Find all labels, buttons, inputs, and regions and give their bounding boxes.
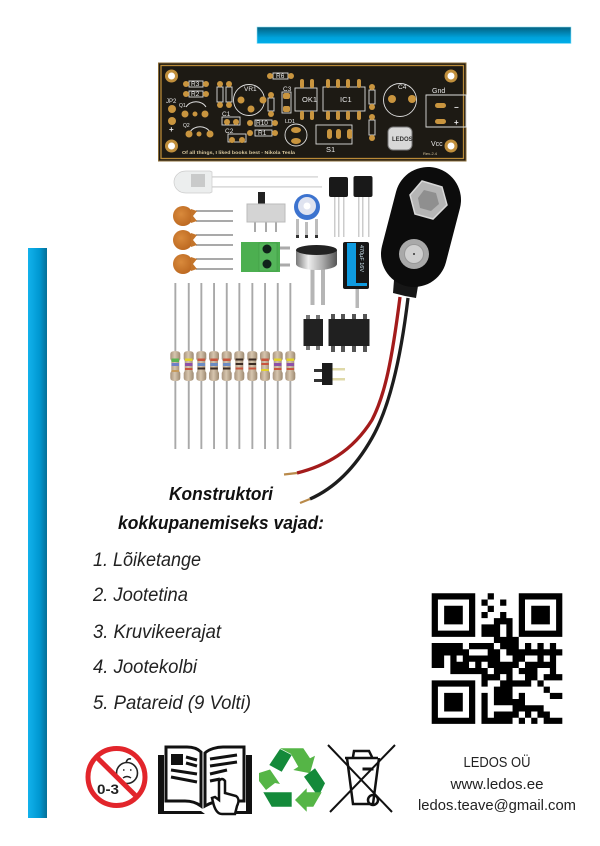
clip round snap bbox=[399, 239, 429, 269]
board labels: C1 bbox=[222, 111, 231, 118]
board mounting holes bbox=[166, 71, 456, 151]
icon: read the manual bbox=[158, 747, 252, 814]
heading bbox=[118, 484, 324, 533]
board labels: R10 bbox=[256, 120, 268, 127]
board labels: C4 bbox=[398, 84, 407, 91]
slide switch bbox=[247, 192, 285, 232]
company contacts bbox=[418, 753, 576, 814]
electrolytic capacitor bbox=[343, 242, 369, 308]
optocoupler OK1 bbox=[304, 315, 323, 350]
tools list: 1. Lõiketange bbox=[93, 550, 201, 571]
clip hex snap bbox=[410, 181, 447, 219]
icon: not for children 0-3 bbox=[88, 748, 145, 806]
battery wires bbox=[284, 297, 408, 503]
terminal block bbox=[241, 242, 290, 272]
board labels: JP2 bbox=[166, 99, 177, 105]
board labels: S1 bbox=[326, 145, 335, 154]
company contacts: www.ledos.ee bbox=[449, 777, 544, 793]
tools list: 5. Patareid (9 Volti) bbox=[93, 693, 251, 714]
board labels: Q2 bbox=[183, 123, 190, 129]
board pads bbox=[168, 73, 446, 144]
LED bbox=[174, 171, 322, 193]
board labels: R2 bbox=[191, 91, 200, 98]
integrated circuit IC1 bbox=[328, 314, 370, 352]
pin header bbox=[314, 363, 345, 385]
board labels: + bbox=[169, 125, 174, 134]
left blue bar bbox=[28, 248, 47, 818]
board labels: − bbox=[454, 103, 459, 112]
tools list: 4. Jootekolbi bbox=[93, 657, 198, 678]
QR code bbox=[432, 593, 562, 724]
board labels: Vcc bbox=[431, 141, 443, 148]
board labels: IC1 bbox=[340, 95, 352, 104]
board labels: Q1 bbox=[179, 103, 186, 109]
icon: not for children 0-3: 0-3 bbox=[97, 781, 119, 797]
battery clip bbox=[393, 181, 447, 298]
trimmer potentiometer bbox=[294, 194, 320, 238]
circuit board bbox=[158, 63, 466, 161]
board labels: R3 bbox=[191, 81, 200, 88]
ceramic capacitors bbox=[173, 206, 233, 274]
top blue bar bbox=[257, 27, 571, 44]
board logo bbox=[388, 127, 412, 150]
icon: recycling bbox=[259, 748, 325, 812]
board labels: VR1 bbox=[244, 86, 257, 93]
transistors bbox=[329, 176, 372, 237]
board labels: LEDOS bbox=[392, 137, 413, 143]
electrolytic capacitor: 470µF 16V bbox=[358, 245, 364, 272]
heading: Konstruktori bbox=[169, 484, 274, 504]
microphone bbox=[296, 245, 337, 305]
board labels: + bbox=[454, 118, 459, 127]
board labels: Rev-2.4 bbox=[423, 151, 438, 156]
company contacts: ledos.teave@gmail.com bbox=[418, 798, 576, 814]
board labels: R6 bbox=[276, 73, 285, 80]
board labels: Gnd bbox=[432, 88, 445, 95]
tools list bbox=[92, 550, 251, 714]
board labels: C3 bbox=[283, 86, 292, 93]
board labels: OK1 bbox=[302, 95, 317, 104]
tools list: 3. Kruvikeerajat bbox=[93, 622, 222, 643]
tools list: 2. Jootetina bbox=[92, 585, 188, 606]
icon: crossed-out bin bbox=[328, 745, 395, 812]
board labels: LD1 bbox=[285, 119, 295, 125]
resistors bbox=[170, 283, 295, 449]
heading: kokkupanemiseks vajad: bbox=[118, 513, 324, 533]
board labels: R1 bbox=[258, 130, 267, 137]
board labels: Of all things, I liked books best - Nikola Tesla bbox=[182, 150, 295, 155]
board labels: C2 bbox=[225, 128, 234, 135]
company contacts: LEDOS OÜ bbox=[464, 753, 530, 771]
board outlines bbox=[186, 73, 466, 146]
board labels bbox=[166, 73, 459, 156]
